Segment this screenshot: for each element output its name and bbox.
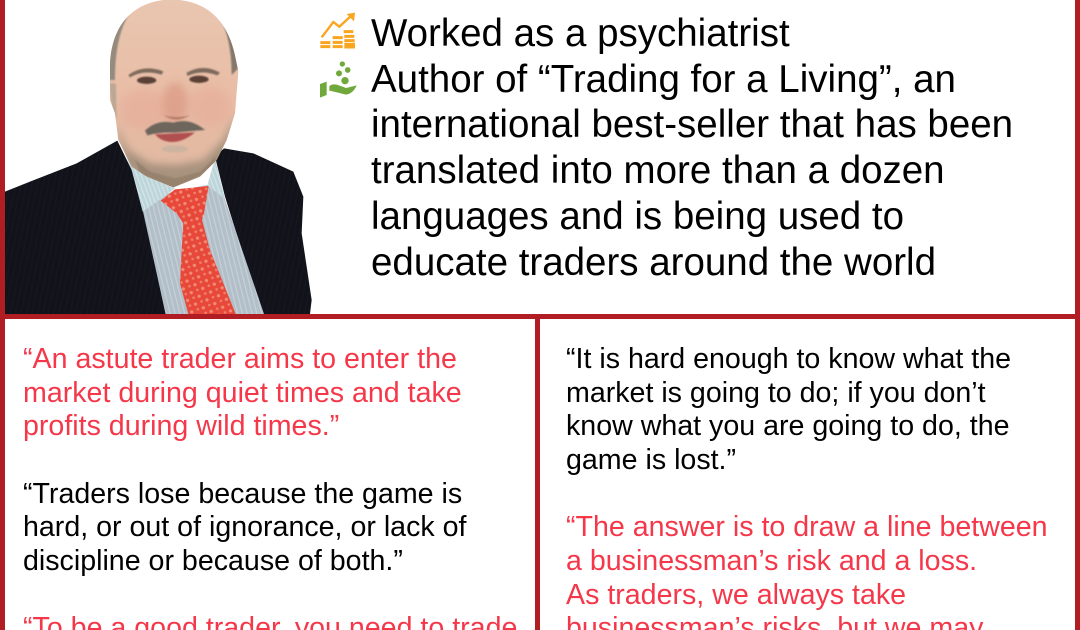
nose shadow [163,115,190,119]
cheeks [124,92,161,125]
quote: traders lose [23,478,466,577]
beard [117,118,234,188]
text block: biography: international best-seller that has been [371,103,1013,146]
hair [110,15,130,81]
text block: biography [371,12,1013,284]
quote: traders lose: hard, or out of ignorance, or lack of [23,511,466,543]
quote: hard enough: market is going to do; if you don’t [566,377,986,409]
horizontal divider [0,314,1080,319]
text block: biography: translated into more than a dozen [371,149,945,192]
quote: traders lose: discipline or because of both.” [23,545,403,577]
brows and eyes [128,68,220,142]
quote: businessman's risk: “The answer is to draw a line between [566,511,1048,543]
icon: rising coins [320,12,355,48]
jacket [5,141,166,314]
quote: businessman's risk: a businessman’s risk and a loss. [566,545,977,577]
panel: right quotes [566,343,1048,630]
head [107,0,240,193]
quote: hard enough [566,343,1011,476]
text block: biography: languages and is being used to [371,195,904,238]
portrait photo [5,0,312,314]
column divider [535,319,540,630]
icon: hand with coins [320,61,357,98]
quote: hard enough: “It is hard enough to know what the [566,343,1011,375]
quote: businessman's risk: As traders, we always take [566,579,906,611]
mouth [155,132,195,142]
quote: astute trader: “An astute trader aims to enter the [23,343,457,375]
quote: astute trader: profits during wild times.” [23,410,339,442]
moustache [145,121,205,135]
tie [161,186,236,314]
right border [1075,0,1080,630]
collar [119,140,175,212]
quote: traders lose: “Traders lose because the game is [23,478,462,510]
text block: biography: Worked as a psychiatrist [371,12,790,55]
quote: astute trader: market during quiet times and take [23,377,462,409]
left border [0,0,5,630]
shirt [143,185,264,314]
quote: hard enough: game is lost.” [566,444,736,476]
quote: astute trader [23,343,462,442]
quote: businessman's risk [566,511,1048,630]
quote: hard enough: know what you are going to do, the [566,410,1010,442]
text block: biography: Author of “Trading for a Living”, an [371,58,956,101]
panel: left quotes [23,343,517,630]
text block: biography: educate traders around the world [371,241,936,284]
